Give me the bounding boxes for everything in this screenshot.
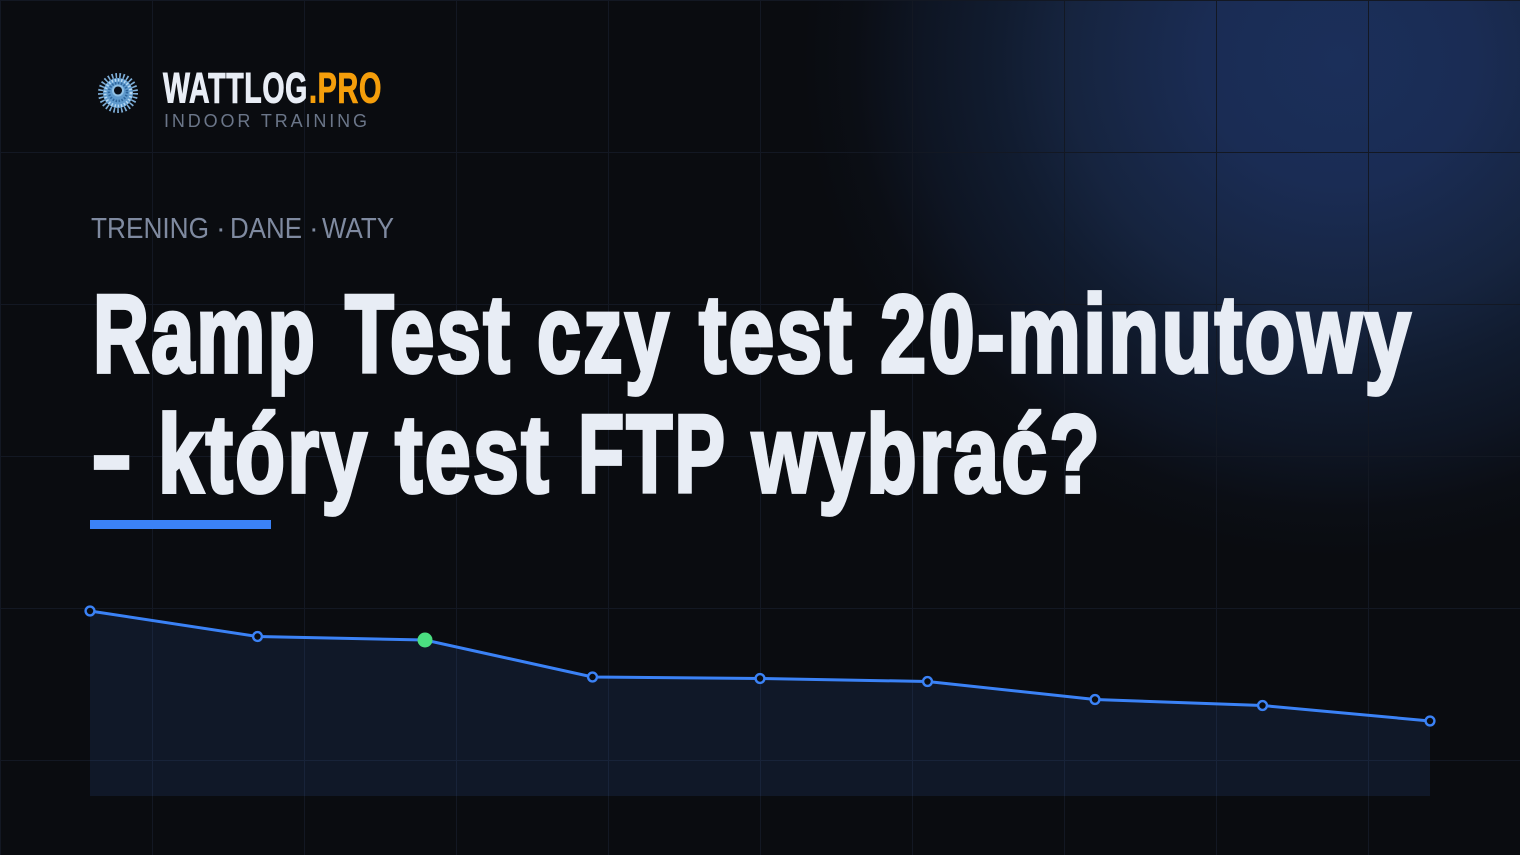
eyebrow: DANE	[230, 213, 302, 245]
title	[93, 273, 1413, 516]
logo	[100, 66, 382, 131]
brand name: .PRO	[309, 66, 382, 112]
highlighted data point	[418, 632, 432, 648]
chart line	[90, 611, 1430, 721]
title: test	[395, 393, 551, 516]
eyebrow: WATY	[322, 213, 394, 245]
eyebrow: TRENING	[91, 213, 209, 245]
eyebrow: ·	[309, 213, 319, 245]
title: test	[699, 273, 854, 396]
title: FTP	[578, 393, 727, 516]
title: –	[93, 393, 132, 516]
eyebrow: ·	[216, 213, 226, 245]
title: Test	[345, 273, 512, 396]
icon: cassette gear	[100, 76, 136, 110]
brand name: WATTLOG	[163, 66, 308, 112]
chart data points	[86, 607, 1434, 725]
line chart	[86, 607, 1434, 796]
title: wybrać?	[751, 393, 1102, 516]
chart area fill	[90, 611, 1430, 796]
title: Ramp	[93, 273, 317, 396]
tagline: INDOOR TRAINING	[164, 111, 367, 131]
title: który	[158, 393, 369, 516]
title underline	[90, 520, 271, 529]
title: czy	[537, 273, 671, 396]
eyebrow	[91, 213, 394, 245]
